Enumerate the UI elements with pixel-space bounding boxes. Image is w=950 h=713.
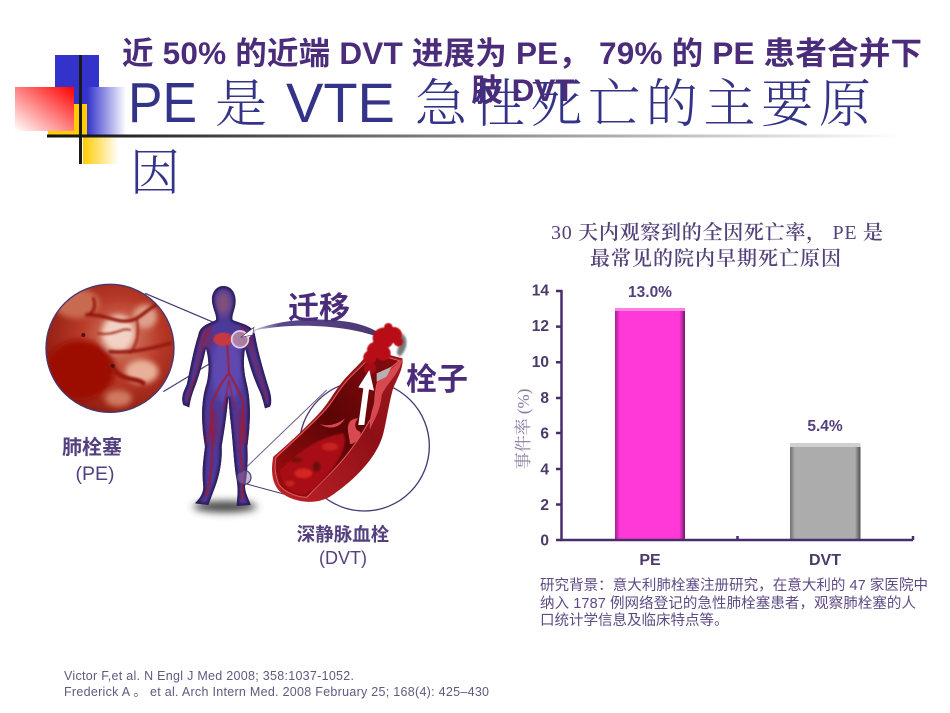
x axis labels <box>639 552 841 569</box>
slide heading: PE 是 VTE 急性死亡的主要原因: VTE <box>286 71 395 134</box>
chart title: 最常见的院内早期死亡原因 <box>590 247 842 270</box>
chart title <box>551 220 883 270</box>
icon: human body with veins <box>182 286 272 506</box>
slide heading: PE 是 VTE 急性死亡的主要原因: 急性死亡的主要原 <box>415 77 877 134</box>
zoom connector lines to the lung <box>145 293 237 392</box>
study background note: 纳入 1787 例网络登记的急性肺栓塞患者，观察肺栓塞的人 <box>540 594 916 612</box>
slide heading: PE 是 VTE 急性死亡的主要原因 <box>128 71 877 201</box>
bar: PE 13.0%: 13.0% <box>628 284 672 301</box>
x axis labels: PE <box>639 552 661 569</box>
chart title: 30 天内观察到的全因死亡率， PE 是 <box>551 220 883 244</box>
y axis ticks: 12 <box>532 318 549 335</box>
study background note: 研究背景：意大利肺栓塞注册研究，在意大利的 47 家医院中 <box>540 576 928 594</box>
magnified vein outline circle <box>299 381 429 511</box>
y axis ticks: 10 <box>532 354 549 371</box>
label: pulmonary embolism <box>62 435 122 485</box>
icon: lung tissue magnified circle <box>45 284 174 412</box>
label: deep vein thrombosis: (DVT) <box>319 548 367 568</box>
y axis label: 事件率 (%) <box>514 389 533 469</box>
connector lines to the vein <box>240 390 327 497</box>
references <box>64 669 489 699</box>
slide heading: PE 是 VTE 急性死亡的主要原因: 是 <box>215 77 267 134</box>
label: deep vein thrombosis: 深静脉血栓 <box>297 524 390 545</box>
overlaid headline <box>122 35 922 108</box>
study background note: 口统计学信息及临床特点等。 <box>540 611 728 629</box>
slide heading: PE 是 VTE 急性死亡的主要原因: PE <box>128 71 197 135</box>
label: embolus: 栓子 <box>406 362 468 397</box>
y axis ticks: 0 <box>540 532 549 550</box>
references: Victor F,et al. N Engl J Med 2008; 358:1037-1052. <box>64 669 354 683</box>
y axis ticks: 8 <box>540 390 549 407</box>
slide heading: PE 是 VTE 急性死亡的主要原因: 因 <box>130 145 180 201</box>
y axis ticks: 14 <box>532 282 549 300</box>
arrow tip <box>241 327 254 337</box>
references: Frederick A 。 et al. Arch Intern Med. 2008 February 25; 168(4): 425–430 <box>64 685 489 699</box>
zoom ring on the calf <box>237 470 251 484</box>
label: pulmonary embolism: 肺栓塞 <box>62 435 122 459</box>
y axis ticks: 2 <box>540 497 549 514</box>
icon: cut-open vein with clot <box>272 323 406 502</box>
study background note <box>540 576 928 629</box>
diagram: PE and DVT anatomy <box>45 283 429 512</box>
x axis labels: DVT <box>809 552 841 569</box>
overlaid headline: 肢 DVT <box>471 72 575 108</box>
bar chart <box>514 282 913 569</box>
bar: DVT 5.4% <box>790 418 860 540</box>
label: migration: 迁移 <box>288 291 350 326</box>
label: pulmonary embolism: (PE) <box>76 463 114 485</box>
y axis ticks: 4 <box>540 462 549 478</box>
label: deep vein thrombosis <box>297 524 390 568</box>
arrow: migration arc to the lung <box>243 319 387 338</box>
zoom ring on the chest <box>232 331 248 348</box>
bar: DVT 5.4%: 5.4% <box>807 418 843 435</box>
chart axes <box>556 290 913 540</box>
decorative logo squares <box>15 55 126 164</box>
y axis ticks <box>532 282 549 550</box>
arrow: clot travels up <box>358 370 374 425</box>
icon: body floor shadow <box>193 501 257 512</box>
y axis ticks: 6 <box>540 426 549 442</box>
bar: PE 13.0% <box>615 284 685 540</box>
overlaid headline: 近 50% 的近端 DVT 进展为 PE， 79% 的 PE 患者合并下 <box>122 35 922 71</box>
title rule <box>47 134 905 138</box>
